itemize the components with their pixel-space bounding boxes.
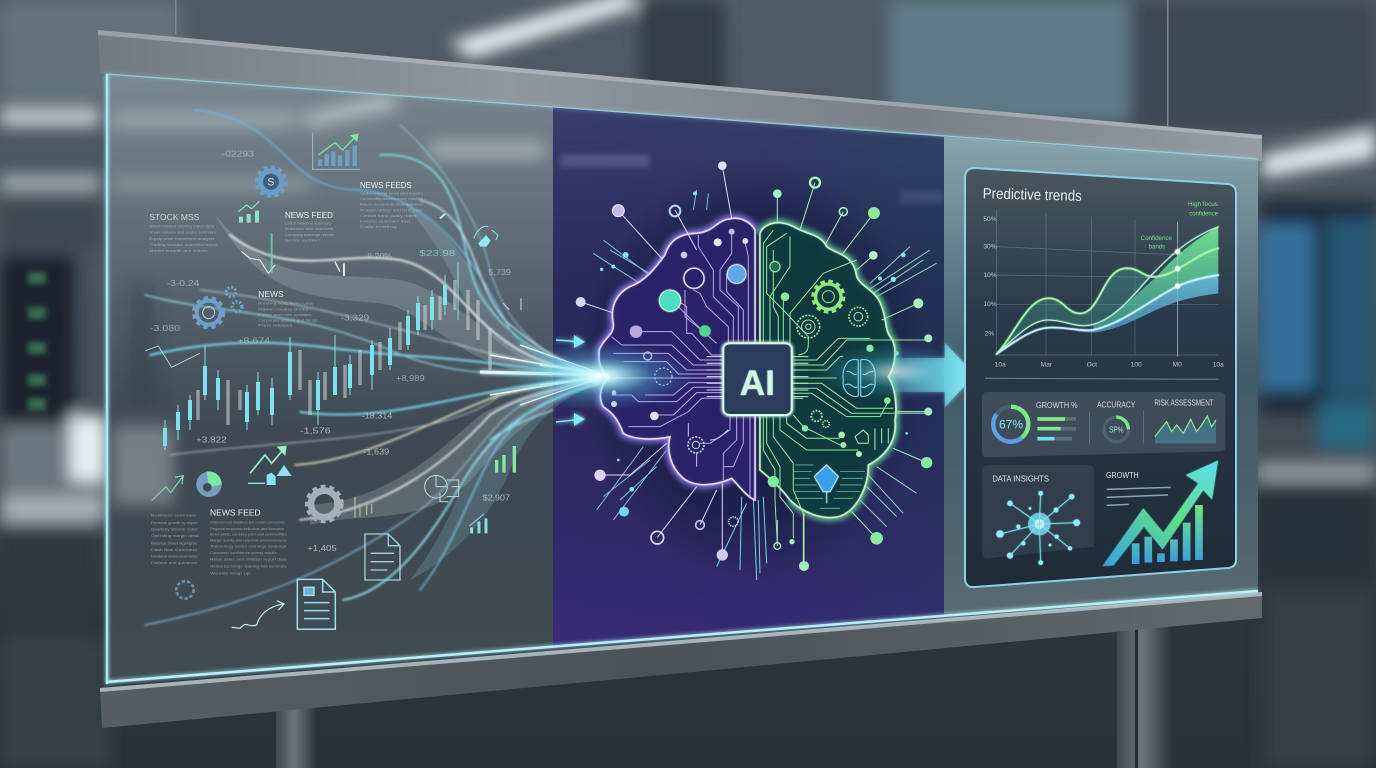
band: blue	[997, 275, 1218, 354]
number labels	[150, 149, 511, 383]
donut 67%: 67%	[999, 417, 1023, 431]
number labels: $23.98	[419, 248, 456, 258]
y axis labels: 2%	[985, 330, 994, 337]
heading: stock: Equity price movement analysis	[149, 237, 215, 241]
number labels: +8,674	[237, 336, 270, 346]
right circuit traces	[763, 230, 927, 567]
trend lines	[997, 227, 1218, 354]
heading: news feeds: Daily briefing	[360, 225, 397, 229]
metric and insight cards	[982, 392, 1225, 566]
heading: news feeds: Investor sentiment feed	[360, 220, 410, 224]
y axis labels: 10%	[983, 301, 997, 308]
text block: news feed	[210, 507, 288, 575]
heading: stock: STOCK MSS	[149, 212, 200, 222]
glowing inner nodes	[659, 262, 780, 337]
icon: grey gear	[307, 487, 342, 521]
data lines in lower right lobe	[793, 465, 865, 508]
text block: news feed: Merger activity and corporate announcements	[210, 539, 287, 543]
text block: small: Dividend announcements	[151, 555, 198, 559]
icon: scattered marks	[355, 497, 372, 517]
text block: news feed: Global exchange opening bell summary	[210, 565, 287, 569]
radiating sparks	[593, 190, 937, 580]
heading: news feeds: Analyst ratings and forecasts	[360, 208, 422, 212]
heading: news: Corporate actions and filings	[258, 318, 318, 322]
icon: bar chart with rising arrow	[313, 133, 360, 169]
x axis labels: 10a	[995, 362, 1006, 369]
translucent ribbon: far lower	[410, 382, 600, 580]
chip pins	[707, 357, 808, 397]
heading: news	[258, 289, 318, 328]
purple AI processing panel	[553, 106, 944, 648]
mounting posts	[276, 620, 1171, 768]
text block: small: Business summary	[151, 514, 196, 518]
cluster icon, lower left nodes	[655, 368, 738, 526]
heading: news feeds: Global market news and reports	[360, 192, 423, 196]
growth arrow	[1103, 461, 1218, 566]
green legend note: Confidence	[1141, 235, 1172, 242]
spark dots	[600, 191, 908, 492]
heading: news feed: NEWS FEED	[285, 210, 333, 220]
number labels: -3.080	[150, 323, 180, 333]
divider	[1089, 410, 1143, 443]
text block: news feed: Weekly wrap up	[210, 571, 250, 575]
right bloom	[815, 344, 975, 400]
x axis labels	[995, 362, 1224, 369]
small arrows into brain	[556, 335, 585, 426]
growth card	[1103, 461, 1218, 566]
heading: news feeds: Central bank policy notes	[360, 214, 417, 218]
icon: faint gear	[176, 581, 194, 599]
glass panel: output	[944, 134, 1258, 616]
heading: news: Press releases	[258, 324, 293, 328]
brain halo	[599, 218, 896, 517]
risk assessment sparkline: RISK ASSESSMENT	[1154, 398, 1214, 407]
chart title: Predictive trends	[983, 185, 1082, 205]
growth bars	[1136, 505, 1199, 564]
text block: news feed: NEWS FEED	[210, 507, 261, 517]
left circuit traces	[603, 230, 750, 497]
text block: news feed: Financial news headlines and market commentary	[210, 520, 285, 524]
icon: cyan bars	[469, 514, 486, 533]
heading: stock: Share volume and sector summary	[149, 231, 216, 235]
donut 67%	[993, 407, 1028, 442]
x axis labels: Mar	[1041, 362, 1053, 369]
text block: small: Balance sheet highlights	[151, 541, 197, 545]
heading: news feeds: Commodity and currency updates	[360, 197, 423, 201]
number labels	[196, 411, 510, 553]
house icon	[474, 226, 498, 247]
heading: news: Market moving stories	[258, 307, 309, 311]
icon: pie chart	[196, 471, 222, 497]
heading: news feeds: Macro economic data releases	[360, 203, 424, 207]
heading: news feeds	[360, 180, 424, 229]
number labels: +8,989	[396, 373, 425, 383]
metrics row	[982, 392, 1225, 457]
text block: small: Operating margin detail	[151, 534, 200, 538]
icon: gears	[194, 287, 242, 327]
number labels: -18,314	[362, 411, 393, 421]
translucent ribbon: right	[400, 200, 600, 376]
growth bars	[1036, 400, 1078, 439]
data insights card: DATA INSIGHTS	[992, 473, 1049, 483]
heading: news: Policy and rate updates	[258, 313, 312, 317]
heading: news feed: Business wire overview	[285, 227, 334, 231]
metal frame	[98, 30, 1262, 728]
data streams flowing into the brain	[145, 110, 605, 625]
y axis labels: 30%	[983, 244, 997, 251]
heading: stock: Trading session overview report	[149, 243, 218, 247]
input panel: data sources upper	[145, 133, 521, 383]
glass panel background streaks	[112, 93, 545, 505]
y axis labels: 10%	[983, 272, 997, 279]
number labels: -1,639	[363, 447, 390, 457]
icon: dollar gear	[256, 167, 286, 196]
heading: news feed: Company earnings reports	[285, 233, 334, 237]
heading: stock: Stock market closing index data	[149, 224, 216, 228]
candlesticks	[165, 262, 490, 450]
right hemisphere	[760, 223, 896, 517]
heading: news: NEWS	[258, 289, 284, 299]
stream lines: upper	[145, 110, 600, 376]
y axis labels	[983, 216, 997, 337]
radial node lines	[581, 166, 927, 566]
number labels: -3-0.24	[167, 278, 200, 288]
bright convergence streaks	[480, 345, 605, 405]
green legend note: confidence	[1189, 210, 1218, 217]
number labels: +3.822	[196, 435, 227, 445]
heading: stock: Market breadth and indices	[149, 249, 208, 253]
number labels: 5,739	[488, 267, 511, 277]
green area	[997, 268, 1150, 354]
icon: small growth bars	[238, 201, 259, 223]
AI brain illustration	[576, 161, 937, 580]
icon: dollar gear: S	[267, 177, 275, 189]
forecast markers	[1175, 249, 1180, 289]
x axis labels: 10a	[1213, 362, 1224, 369]
translucent ribbon: lower	[310, 378, 600, 525]
number labels: +1,405	[307, 543, 337, 553]
text block: small	[151, 514, 200, 565]
text block: small: Cash flow statement	[151, 548, 197, 552]
icon: curved arrow	[232, 601, 284, 628]
icon: circuit hook	[855, 428, 888, 450]
text block: news feed: Regional economic indicators and forecasts	[210, 527, 284, 531]
text block: news feed: Retail sales and inflation report data	[210, 557, 288, 561]
green legend note: High focus	[1188, 201, 1219, 208]
output dashboard panel	[965, 168, 1236, 587]
number labels: -3,329	[341, 312, 370, 322]
icon: rising line	[152, 476, 183, 501]
number labels: -1,576	[300, 425, 331, 435]
heading: news: Breaking news items today	[258, 302, 314, 306]
band: green	[1093, 227, 1218, 330]
number labels: -02293	[222, 149, 254, 159]
text block: news feed: Consumer confidence survey results	[210, 551, 277, 555]
accuracy gauge: ACCURACY	[1097, 399, 1135, 409]
growth bars: GROWTH %	[1036, 400, 1078, 410]
outer nodes	[576, 161, 932, 571]
central bloom	[505, 342, 695, 410]
growth card: GROWTH	[1106, 470, 1139, 480]
small line traces	[145, 214, 521, 367]
heading: news feed: Sector updates	[285, 239, 320, 243]
AI label: AI	[740, 364, 775, 403]
text block: news feed: Bond yields, currency pairs and commodities	[210, 533, 287, 537]
icon: growth arrow and triangles	[248, 446, 292, 485]
glass panel: input data	[106, 72, 553, 684]
accuracy gauge	[1097, 399, 1135, 442]
risk assessment sparkline	[1154, 398, 1216, 443]
icon: small gears	[797, 307, 868, 427]
grid lines	[997, 210, 1218, 355]
translucent ribbon: upper	[215, 215, 600, 379]
icon: glowing bulb	[814, 465, 838, 503]
x axis labels: 100	[1131, 362, 1142, 369]
heading: news feed: Latest headline summary	[285, 222, 332, 226]
green legend note: bands	[1149, 244, 1166, 251]
text block: news feed: Technology sector earnings coverage	[210, 544, 287, 548]
data insights card	[982, 465, 1094, 565]
AI chip	[723, 343, 792, 415]
heading: stock	[149, 212, 218, 253]
green legend note	[1141, 201, 1219, 251]
x axis labels: M0	[1173, 362, 1182, 369]
text block: small: Outlook and guidance	[151, 561, 197, 565]
x axis labels: Oct	[1087, 362, 1097, 369]
stream lines: lower	[145, 378, 600, 625]
icon: green gear	[814, 282, 843, 311]
glowing glass edges	[106, 74, 1258, 684]
accuracy gauge: SP%	[1109, 425, 1124, 435]
left hemisphere	[599, 218, 755, 500]
input panel: data sources lower	[151, 411, 514, 629]
icon: pie and connector	[425, 475, 459, 502]
text block: small: Quarterly income notes	[151, 528, 198, 532]
icon: green bars	[497, 446, 514, 473]
text block: small: Revenue growth by region	[151, 521, 198, 525]
centre divider	[755, 230, 760, 417]
chart panel: predictive trends	[983, 185, 1224, 379]
network cluster	[996, 491, 1080, 565]
heading: news feed	[285, 210, 334, 243]
icon: blue brain	[843, 359, 875, 396]
y axis labels: 50%	[983, 216, 997, 223]
icon: document small	[365, 534, 400, 580]
heading: news feeds: NEWS FEEDS	[360, 180, 412, 190]
icon: document large	[297, 579, 335, 629]
number labels: $2,907	[483, 492, 510, 502]
output arrow	[880, 343, 975, 407]
number labels: 8.20%	[367, 251, 393, 261]
